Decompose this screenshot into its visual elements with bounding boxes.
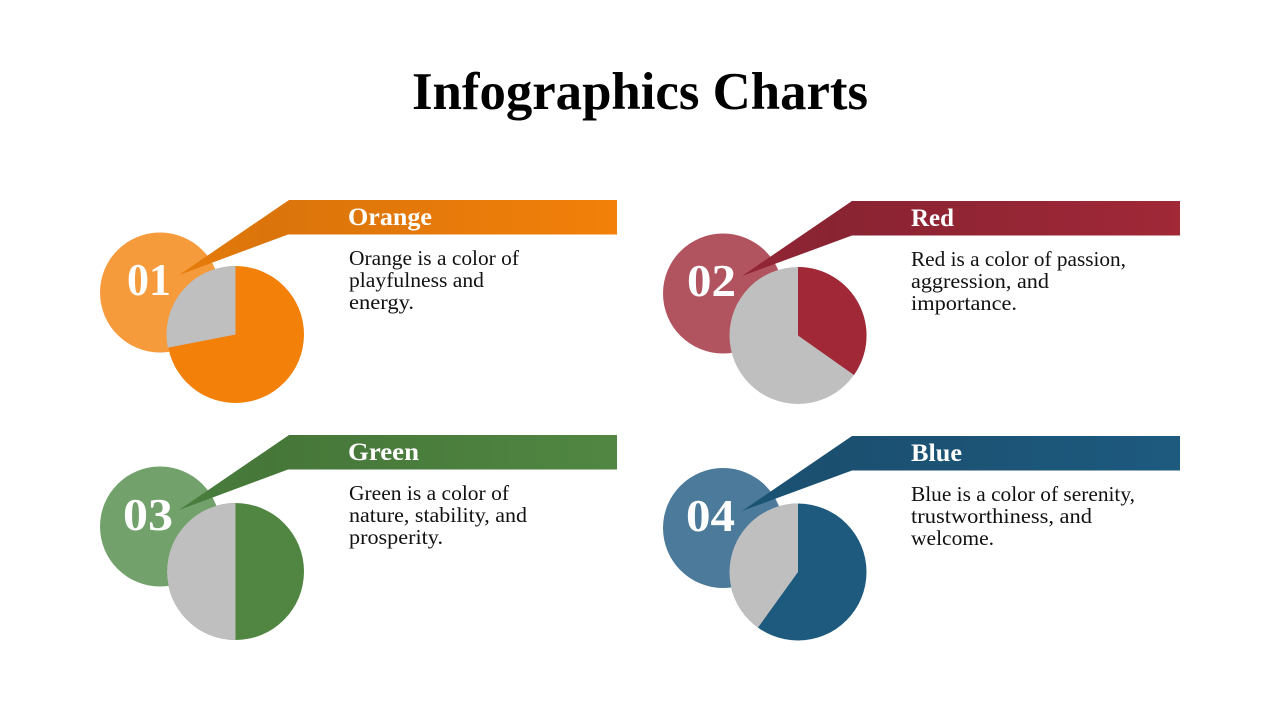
banner: orange [179,200,617,275]
text: red description: Red is a color of passion, [911,247,1126,271]
text: blue description: welcome. [911,526,994,550]
number circle: 01 [100,232,220,352]
panel: orange [100,200,617,403]
text: green description [349,481,528,549]
banner: red [742,201,1180,276]
text: orange description [349,246,519,314]
number: 01: 01 [127,254,171,305]
number circle: 03 [100,466,220,586]
pie chart: green [167,503,304,640]
heading: Orange: Orange [348,204,432,231]
text: orange description: Orange is a color of [349,246,519,270]
number circle: 04 [663,468,783,588]
title: Infographics Charts [412,63,868,121]
pie chart: red [730,267,867,404]
number circle: 02 [663,234,783,354]
banner: blue [742,436,1180,511]
banner: green [179,435,617,510]
heading: Red: Red [911,205,954,232]
text: blue description: trustworthiness, and [911,504,1093,528]
text: red description: aggression, and [911,269,1050,293]
heading: Blue: Blue [911,440,962,467]
number: 02: 02 [687,255,736,306]
panel: blue [663,436,1180,640]
number: 03: 03 [123,489,173,540]
text: orange description: playfulness and [349,268,484,292]
number: 04: 04 [686,490,735,541]
pie chart: blue [730,504,866,640]
pie chart: orange [166,266,304,403]
text: red description [911,247,1126,315]
panel: green [100,435,617,640]
text: orange description: energy. [349,290,414,314]
text: green description: nature, stability, and [349,503,528,527]
heading: Green: Green [348,439,419,466]
text: green description: prosperity. [349,525,443,549]
text: blue description: Blue is a color of serenity, [911,482,1135,506]
text: blue description [911,482,1135,550]
text: red description: importance. [911,291,1017,315]
text: green description: Green is a color of [349,481,509,505]
panel: red [663,201,1180,404]
